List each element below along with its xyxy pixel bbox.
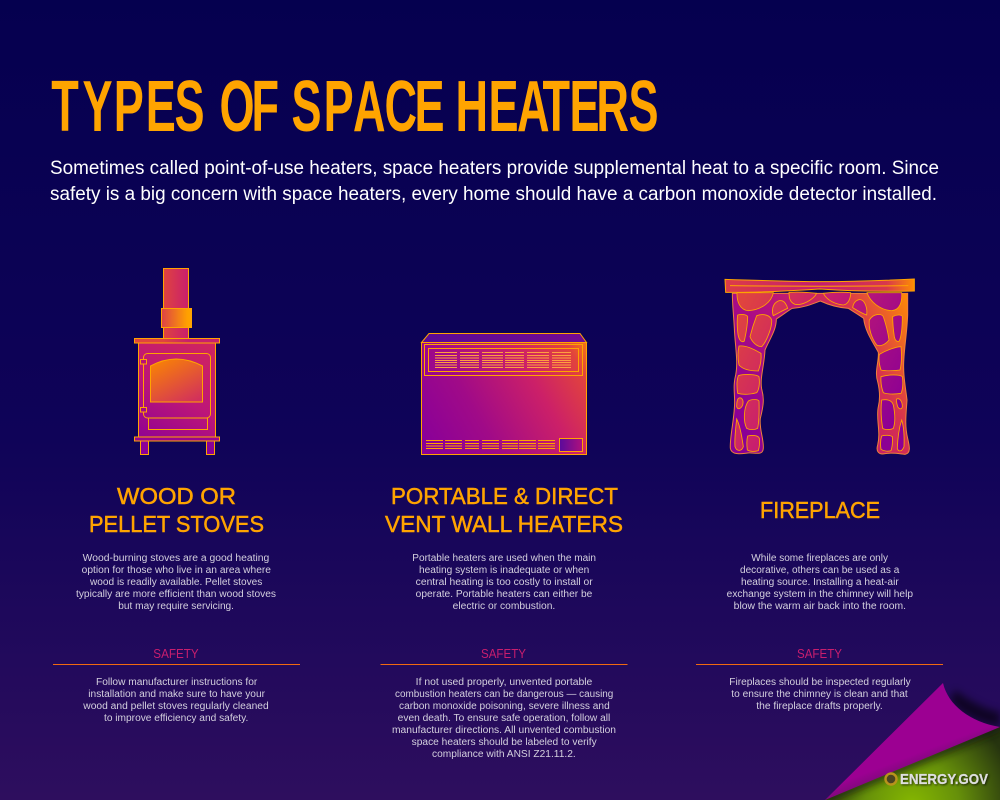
safety heading: SAFETY <box>481 647 527 661</box>
description: wood stoves: typically are more efficient than wood stoves <box>76 589 276 600</box>
icon: wood stove <box>134 268 220 454</box>
intro text: safety is a big concern with space heaters, every home should have a carbon monoxide detector installed. <box>50 184 937 205</box>
safety text: fireplace: Fireplaces should be inspected regularly <box>729 677 911 688</box>
description: fireplace: decorative, others can be used as a <box>740 565 900 576</box>
heading: portable and direct vent wall heaters <box>385 483 623 537</box>
description: fireplace: exchange system in the chimney will help <box>727 589 913 600</box>
description: fireplace <box>727 553 913 612</box>
description: wall heaters: operate. Portable heaters can either be <box>416 589 593 600</box>
heading: portable and direct vent wall heaters: VENT WALL HEATERS <box>385 511 623 537</box>
description: fireplace: heating source. Installing a heat-air <box>741 577 899 588</box>
safety text: wall heaters: carbon monoxide poisoning, severe illness and <box>399 701 610 712</box>
safety heading: SAFETY <box>153 647 199 661</box>
page curl corner <box>825 683 1000 800</box>
safety text: wall heaters <box>392 677 616 760</box>
icon: stone fireplace <box>725 279 914 454</box>
safety text: fireplace: to ensure the chimney is clean and that <box>731 689 908 700</box>
panel: wood or pellet stoves <box>53 268 300 724</box>
safety text: wall heaters: combustion heaters can be dangerous — causing <box>395 689 613 700</box>
safety text: wood stoves: installation and make sure to have your <box>88 689 266 700</box>
heading: wood or pellet stoves <box>89 483 264 537</box>
description: fireplace: blow the warm air back into the room. <box>734 601 906 612</box>
heading: portable and direct vent wall heaters: PORTABLE & DIRECT <box>391 483 618 509</box>
safety text: wood stoves: Follow manufacturer instructions for <box>96 677 258 688</box>
logo: energy.gov: ENERGY.GOV <box>900 772 988 788</box>
description: wall heaters: electric or combustion. <box>453 601 555 612</box>
description: wall heaters: heating system is inadequate or when <box>419 565 589 576</box>
icon: wall heater <box>422 334 586 454</box>
safety text: fireplace: the fireplace drafts properly. <box>756 701 883 712</box>
heading: wood or pellet stoves: WOOD OR <box>117 483 236 509</box>
description: wood stoves: option for those who live in an area where <box>82 565 271 576</box>
safety text: wall heaters: manufacturer directions. All unvented combustion <box>392 725 616 736</box>
intro text <box>50 158 939 205</box>
description: wood stoves: Wood-burning stoves are a good heating <box>83 553 269 564</box>
description: wood stoves: but may require servicing. <box>118 601 234 612</box>
safety text: wall heaters: even death. To ensure safe operation, follow all <box>398 713 610 724</box>
safety text: fireplace <box>729 677 911 712</box>
safety text: wall heaters: If not used properly, unvented portable <box>416 677 593 688</box>
heading: fireplace: FIREPLACE <box>760 497 880 523</box>
panel: portable and direct vent wall heaters <box>380 334 628 760</box>
safety heading: SAFETY <box>797 647 843 661</box>
panel: fireplace <box>696 279 943 712</box>
description: wall heaters <box>412 553 596 612</box>
safety text: wood stoves: wood and pellet stoves regularly cleaned <box>82 701 269 712</box>
description: fireplace: While some fireplaces are only <box>751 553 888 564</box>
safety text: wood stoves <box>82 677 269 724</box>
intro text: Sometimes called point-of-use heaters, space heaters provide supplemental heat to a specific room. Since <box>50 158 939 179</box>
description: wood stoves: wood is readily available. Pellet stoves <box>89 577 262 588</box>
description: wall heaters: Portable heaters are used when the main <box>412 553 596 564</box>
heading: wood or pellet stoves: PELLET STOVES <box>89 511 264 537</box>
description: wood stoves <box>76 553 276 612</box>
title: TYPES OF SPACE HEATERS <box>51 65 659 147</box>
safety text: wall heaters: space heaters should be labeled to verify <box>412 737 597 748</box>
safety text: wall heaters: compliance with ANSI Z21.11.2. <box>432 749 576 760</box>
safety text: wood stoves: to improve efficiency and safety. <box>104 713 248 724</box>
description: wall heaters: central heating is too costly to install or <box>416 577 593 588</box>
